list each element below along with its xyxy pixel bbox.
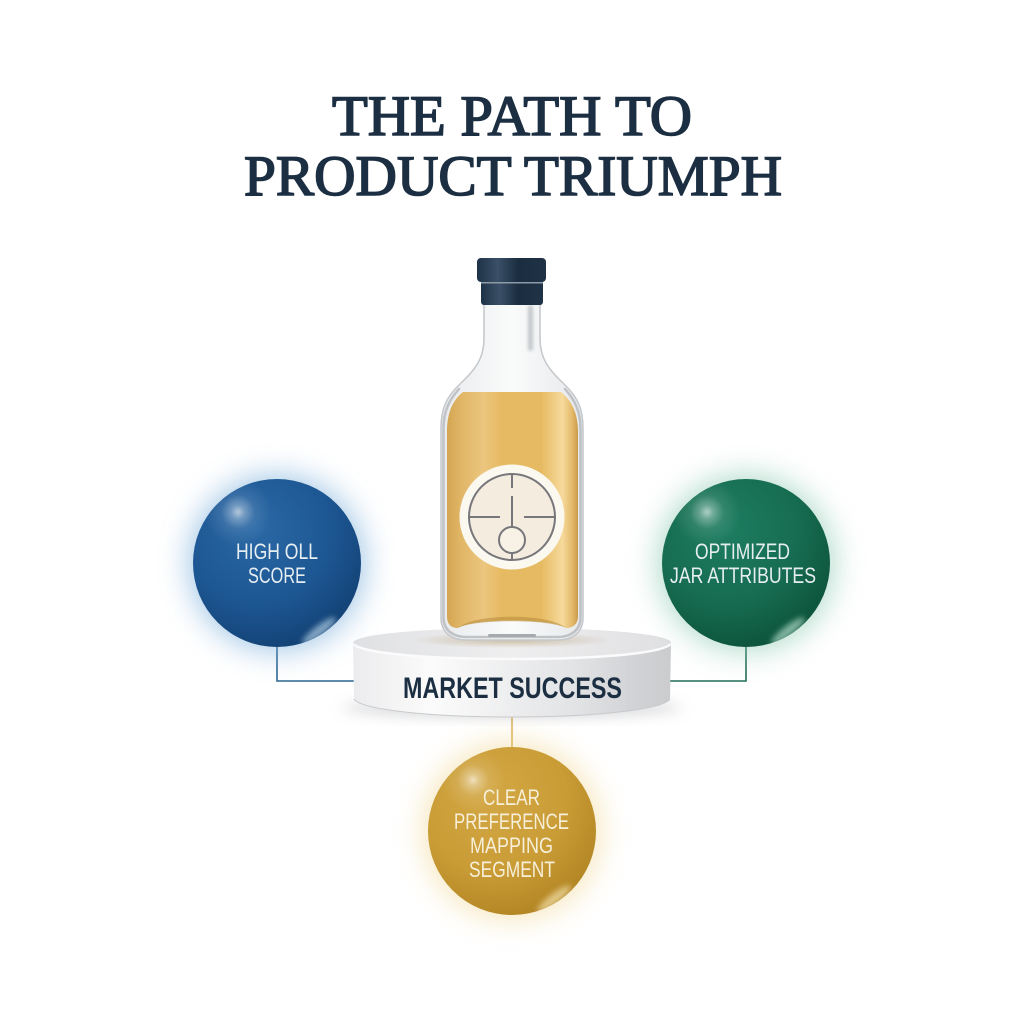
- label: OPTIMIZED: [695, 539, 790, 564]
- label: CLEAR: [483, 785, 540, 810]
- podium: [342, 628, 682, 717]
- title: [244, 85, 782, 208]
- podium label: MARKET SUCCESS: [403, 672, 622, 705]
- podium body: [353, 628, 671, 717]
- target label icon: [460, 464, 564, 570]
- bottle: [412, 258, 612, 648]
- label: HIGH OLL: [236, 539, 318, 564]
- liquid: [447, 392, 578, 628]
- label: [454, 785, 569, 882]
- podium floor shadow: [342, 699, 682, 717]
- title: THE PATH TO: [332, 85, 692, 148]
- connector: gold sphere to podium: [511, 715, 513, 752]
- label: PREFERENCE: [454, 809, 569, 834]
- neck highlight: [528, 305, 533, 351]
- label: [236, 539, 318, 588]
- sphere: optimized JAR attributes: [658, 475, 834, 651]
- bottle glass: [441, 300, 583, 640]
- label: SEGMENT: [469, 857, 555, 882]
- label: JAR ATTRIBUTES: [670, 563, 816, 588]
- connector: blue sphere to podium: [277, 640, 356, 681]
- bottle shadow: [412, 632, 612, 648]
- podium top: [353, 628, 671, 658]
- sphere: clear preference mapping segment: [424, 743, 600, 919]
- connector: green sphere to podium: [668, 640, 746, 681]
- label: [670, 539, 816, 588]
- title: PRODUCT TRIUMPH: [244, 145, 782, 208]
- bottle cap: [477, 258, 546, 305]
- label: SCORE: [248, 563, 306, 588]
- label: MAPPING: [470, 833, 553, 858]
- sphere: high OLL score: [189, 475, 365, 651]
